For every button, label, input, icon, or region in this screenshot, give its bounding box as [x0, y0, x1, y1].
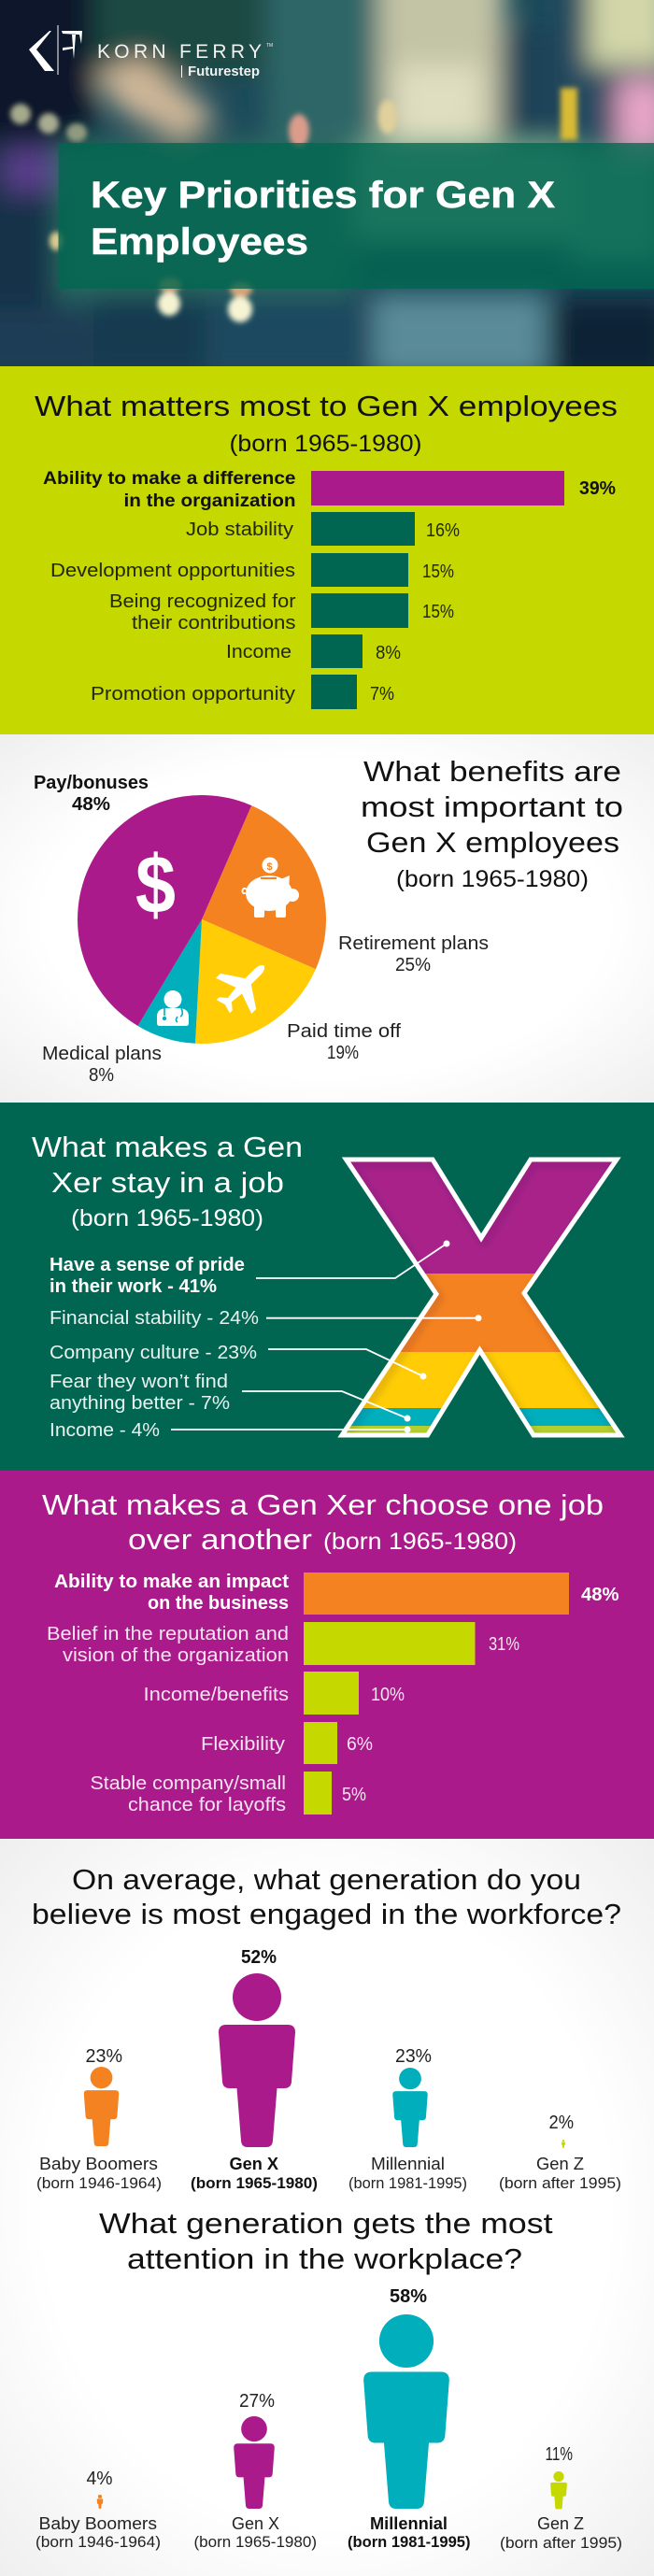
- title: Key Priorities for Gen X: [91, 175, 555, 216]
- figure: Gen Z 2%: (born after 1995): [499, 2174, 621, 2192]
- figure: baby boomers 4%: (born 1946-1964): [36, 2533, 161, 2551]
- heading: believe is most engaged in the workforce?: [32, 1898, 621, 1930]
- figure: Gen Z 11%: Gen Z: [537, 2514, 584, 2533]
- heading: [32, 1131, 303, 1231]
- heading: [361, 755, 623, 892]
- stay labels: Financial stability - 24%: [50, 1308, 259, 1329]
- panel: choose one job over another: [0, 1471, 654, 1839]
- bar labels: Development opportunities: [50, 561, 295, 581]
- stay labels: [50, 1255, 259, 1441]
- bar values: [370, 478, 616, 704]
- bar values: 10%: [371, 1685, 405, 1705]
- figure: Gen Z 11%: 11%: [546, 2444, 573, 2465]
- pie labels: 25%: [395, 955, 431, 975]
- bar labels: Promotion opportunity: [91, 684, 295, 704]
- logo: Korn Ferry Futurestep: [29, 25, 273, 79]
- icon: piggy bank: [242, 858, 299, 918]
- pie labels: Medical plans: [42, 1044, 162, 1064]
- pie labels: 8%: [89, 1065, 114, 1086]
- heading: What generation gets the most: [99, 2207, 553, 2240]
- heading: [32, 1863, 621, 1930]
- figure: Gen X 52%: [191, 1947, 318, 2192]
- heading: What makes a Gen: [32, 1131, 303, 1163]
- trademark: TM: [266, 43, 273, 49]
- figure: Gen X 52%: Gen X: [230, 2155, 278, 2173]
- section: most engaged generation: [32, 1863, 621, 2192]
- heading: (born 1965-1980): [396, 866, 589, 892]
- title: Employees: [91, 221, 308, 263]
- bar labels: Stable company/small: [90, 1773, 286, 1794]
- bar labels: on the business: [148, 1593, 289, 1614]
- bar values: [342, 1585, 619, 1805]
- stay labels: Income - 4%: [50, 1420, 160, 1441]
- pie labels: Retirement plans: [338, 933, 489, 954]
- figure: baby boomers 23%: Baby Boomers: [39, 2155, 158, 2173]
- bar values: 7%: [370, 684, 394, 704]
- bar values: 6%: [347, 1734, 373, 1755]
- bar labels: [47, 1572, 289, 1815]
- bar labels: Belief in the reputation and: [47, 1624, 289, 1644]
- figure: millennial 23%: 23%: [395, 2046, 432, 2067]
- bar labels: in the organization: [123, 491, 295, 511]
- icon: airplane: [206, 947, 282, 1024]
- bar labels: vision of the organization: [63, 1645, 289, 1666]
- bar labels: Ability to make a difference: [43, 468, 296, 489]
- figure: baby boomers 23%: (born 1946-1964): [36, 2174, 162, 2192]
- heading: [42, 1488, 604, 1556]
- figure: Gen Z 2%: Gen Z: [536, 2155, 584, 2173]
- panel: generations lower section: [0, 1839, 654, 2576]
- heading: On average, what generation do you: [72, 1863, 581, 1896]
- figure: millennial 58%: 58%: [390, 2286, 427, 2307]
- figure: Gen X 27%: 27%: [239, 2391, 275, 2412]
- bar values: 5%: [342, 1785, 366, 1805]
- panel: hero header: [0, 0, 654, 383]
- section: most attention: [36, 2207, 622, 2552]
- bar values: 15%: [422, 562, 454, 582]
- sub-brand: Futurestep: [188, 64, 260, 79]
- icon: dollar sign: $: [135, 838, 176, 931]
- bar labels: Being recognized for: [109, 591, 296, 612]
- bar labels: chance for layoffs: [128, 1795, 286, 1815]
- leader lines: [171, 1241, 482, 1433]
- figure: Gen Z 11%: (born after 1995): [500, 2534, 622, 2552]
- heading: over another: [128, 1523, 312, 1556]
- heading: What matters most to Gen X employees: [35, 390, 618, 422]
- pie labels: 19%: [327, 1043, 359, 1063]
- figure: millennial 58%: (born 1981-1995): [348, 2533, 471, 2551]
- heading: [35, 390, 618, 457]
- stay labels: Have a sense of pride: [50, 1255, 245, 1275]
- pie chart: [78, 795, 326, 1044]
- bar values: 31%: [489, 1634, 519, 1655]
- figure: millennial 23%: Millennial: [371, 2155, 445, 2173]
- figure: Gen Z 2%: 2%: [549, 2113, 574, 2133]
- figure: Gen Z 2%: [499, 2113, 621, 2192]
- icon: doctor: [157, 990, 189, 1026]
- pie labels: [34, 773, 489, 1086]
- figure: baby boomers 4%: [36, 2469, 161, 2551]
- panel: why stay in a job: [0, 1103, 654, 1471]
- figure: baby boomers 23%: [36, 2046, 162, 2192]
- stay labels: Company culture - 23%: [50, 1343, 257, 1363]
- title banner: [58, 143, 654, 289]
- figure: millennial 58%: [348, 2286, 471, 2551]
- heading: attention in the workplace?: [127, 2242, 522, 2275]
- chart: striped X: [336, 1155, 626, 1439]
- figure: Gen X 52%: (born 1965-1980): [191, 2174, 318, 2192]
- figure: millennial 23%: (born 1981-1995): [348, 2174, 467, 2192]
- figure: Gen X 27%: [194, 2391, 317, 2551]
- figure: baby boomers 4%: 4%: [86, 2469, 113, 2489]
- bar labels: Income: [226, 642, 291, 662]
- heading: Gen X employees: [366, 826, 619, 859]
- heading: What makes a Gen Xer choose one job: [42, 1488, 604, 1521]
- bar labels: their contributions: [132, 613, 295, 633]
- heading: (born 1965-1980): [323, 1529, 517, 1555]
- heading: (born 1965-1980): [230, 431, 422, 457]
- bar labels: Income/benefits: [144, 1685, 289, 1705]
- icon: KF mark: [29, 25, 82, 75]
- panel: benefits: [0, 734, 654, 1103]
- figure: Gen Z 11%: [500, 2444, 622, 2552]
- stay labels: in their work - 41%: [50, 1276, 217, 1297]
- bar labels: Flexibility: [201, 1734, 285, 1755]
- figure: millennial 23%: [348, 2046, 467, 2192]
- stay labels: Fear they won’t find: [50, 1372, 228, 1392]
- bar chart: [311, 471, 564, 709]
- pie labels: Pay/bonuses: [34, 773, 149, 793]
- pie labels: 48%: [72, 794, 110, 815]
- icon: piggy bank: $: [267, 861, 273, 873]
- bar chart: [304, 1573, 569, 1815]
- bar values: 48%: [581, 1585, 619, 1605]
- bar values: 8%: [376, 643, 401, 663]
- figure: Gen X 27%: (born 1965-1980): [194, 2533, 317, 2551]
- pie labels: Paid time off: [287, 1021, 401, 1042]
- heading: (born 1965-1980): [71, 1205, 263, 1231]
- bar values: 16%: [426, 520, 460, 541]
- brand name: KORN FERRY: [97, 41, 262, 63]
- heading: [99, 2207, 553, 2275]
- stay labels: anything better - 7%: [50, 1393, 230, 1414]
- title: [91, 175, 555, 263]
- figure: millennial 58%: Millennial: [370, 2514, 448, 2533]
- panel: what matters most: [0, 366, 654, 734]
- figure: baby boomers 4%: Baby Boomers: [39, 2514, 157, 2533]
- figure: Gen X 52%: 52%: [241, 1947, 277, 1968]
- bar labels: Job stability: [186, 519, 293, 540]
- figure: Gen X 27%: Gen X: [232, 2514, 279, 2533]
- heading: most important to: [361, 790, 623, 823]
- bar labels: [43, 468, 296, 704]
- heading: What benefits are: [363, 755, 621, 788]
- bar values: 15%: [422, 602, 454, 622]
- figure: baby boomers 23%: 23%: [86, 2046, 122, 2067]
- hero background: blurred city photo: [0, 0, 654, 383]
- heading: Xer stay in a job: [51, 1166, 284, 1199]
- bar values: 39%: [579, 478, 616, 499]
- bar labels: Ability to make an impact: [54, 1572, 289, 1592]
